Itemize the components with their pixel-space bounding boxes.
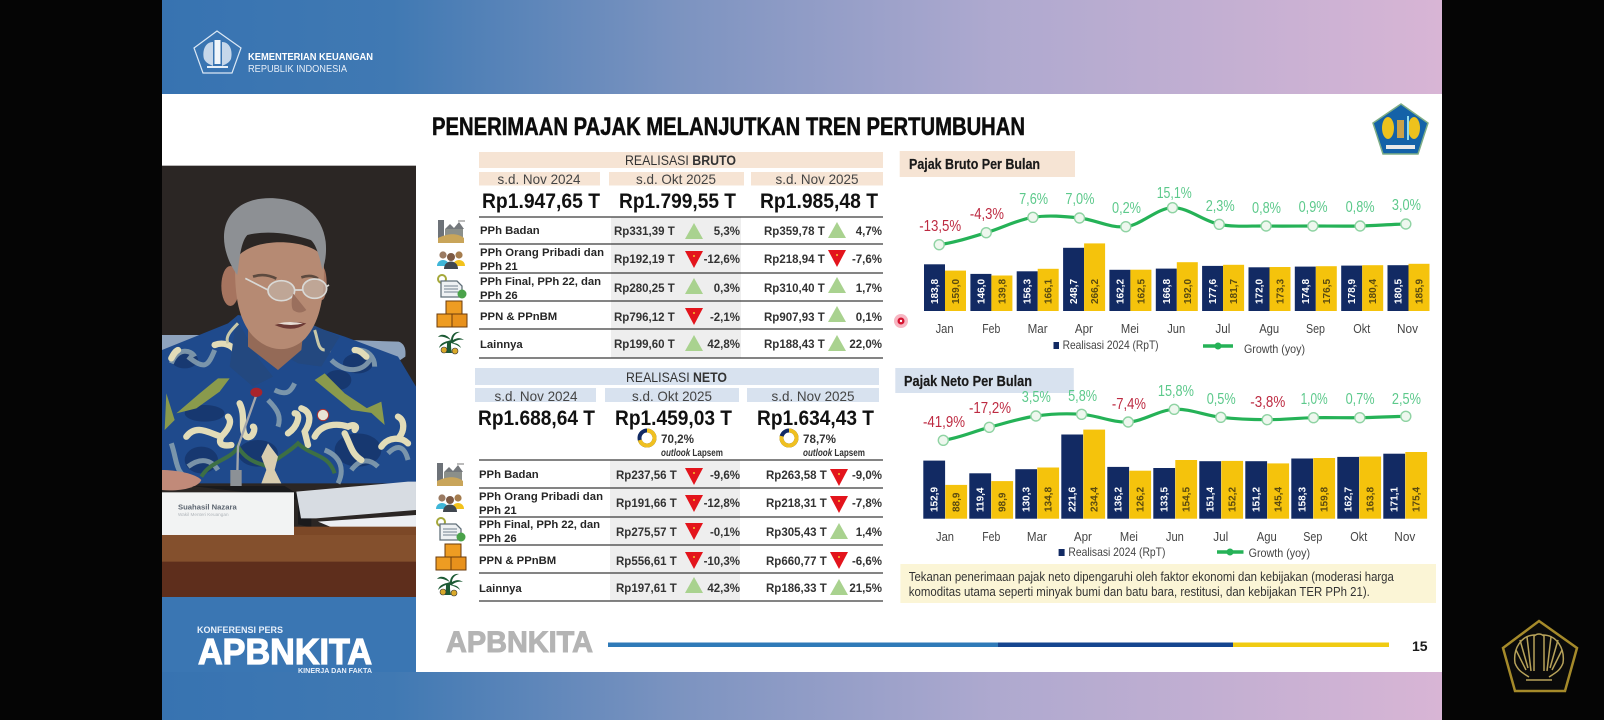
bar values: 146,0 xyxy=(976,279,987,304)
logo: APBNKITA conference: KONFERENSI PERS xyxy=(197,625,283,636)
logo: Kemenkeu emblem xyxy=(1373,104,1428,154)
callout note: komoditas utama seperti minyak bumi dan batu bara, restitusi, dan kebijakan TER PPh 21). xyxy=(909,585,1370,599)
heading: realisasi bruto: REALISASI BRUTO xyxy=(625,152,736,168)
table rows: Rp188,43 T xyxy=(764,339,825,351)
month axis: Jan xyxy=(936,321,954,336)
growth labels: 7,6% xyxy=(1019,191,1048,208)
table rows: 0,3% xyxy=(714,283,740,295)
table rows: Rp310,40 T xyxy=(764,283,825,295)
bar values: 172,0 xyxy=(1254,279,1266,304)
growth labels: 0,2% xyxy=(1112,200,1141,217)
growth labels xyxy=(923,383,1421,431)
logo: APBNKITA conference: APBNKITA xyxy=(198,631,372,672)
panel: realisasi bruto xyxy=(437,152,883,358)
total values: Rp1.985,48 T xyxy=(760,190,878,213)
table rows: 42,3% xyxy=(707,583,740,595)
bar values: 181,7 xyxy=(1229,279,1240,304)
bar values: 159,0 xyxy=(951,279,962,304)
month axis: Mar xyxy=(1027,529,1047,544)
table rows: 1,7% xyxy=(856,283,882,295)
table rows: Rp359,78 T xyxy=(764,226,825,238)
table rows: PPh 26 xyxy=(480,290,518,302)
table rows: -7,6% xyxy=(852,254,882,266)
bar values: 151,4 xyxy=(1206,487,1217,512)
legend: Realisasi 2024 (RpT) xyxy=(1063,338,1159,352)
table rows: Rp280,25 T xyxy=(614,283,675,295)
bars xyxy=(923,430,1427,519)
growth labels: 3,0% xyxy=(1392,197,1421,214)
bar values: 152,2 xyxy=(1228,487,1239,512)
month axis: Jul xyxy=(1213,529,1228,544)
table rows: 21,5% xyxy=(849,583,882,595)
table rows: Rp305,43 T xyxy=(766,527,827,539)
month axis: Feb xyxy=(982,321,1000,336)
table rows xyxy=(479,217,883,358)
growth labels: 2,3% xyxy=(1206,198,1235,215)
bar values: 234,4 xyxy=(1090,487,1101,512)
table rows: PPh 21 xyxy=(479,505,517,517)
growth labels: -17,2% xyxy=(969,400,1011,417)
table rows: PPN & PPnBM xyxy=(479,555,556,567)
bar values: 156,3 xyxy=(1023,279,1034,304)
bar values: 162,7 xyxy=(1344,487,1355,512)
total values: Rp1.459,03 T xyxy=(615,407,732,430)
speaker video photo: Suahasil Nazara xyxy=(178,502,237,511)
bar values: 145,4 xyxy=(1274,487,1285,512)
chart: pajak neto per bulan xyxy=(895,368,1427,560)
table rows: Lainnya xyxy=(479,583,522,595)
column headers xyxy=(479,171,883,187)
footer logo APBNKITA: APBNKITA xyxy=(446,626,593,659)
table rows: -12,8% xyxy=(704,498,740,510)
bar values: 166,1 xyxy=(1044,279,1055,304)
table rows: -12,6% xyxy=(704,254,740,266)
month axis: Okt xyxy=(1353,321,1371,336)
outlook donut okt xyxy=(640,430,723,459)
table rows: Rp263,58 T xyxy=(766,470,827,482)
bar values: 126,2 xyxy=(1136,487,1147,512)
total values xyxy=(482,190,878,213)
total values: Rp1.799,55 T xyxy=(619,190,736,213)
table rows: 4,7% xyxy=(856,226,882,238)
bar values: 119,4 xyxy=(976,487,987,512)
table rows: PPh Orang Pribadi dan xyxy=(480,247,604,259)
white content panel xyxy=(162,94,1442,672)
table rows: PPh Final, PPh 22, dan xyxy=(479,519,600,531)
chart heading: Pajak Bruto Per Bulan xyxy=(909,157,1040,173)
chart heading xyxy=(895,368,1074,393)
heading: realisasi bruto xyxy=(479,152,883,168)
bar values: 136,2 xyxy=(1114,487,1125,512)
month axis xyxy=(936,529,1416,544)
table rows: -6,6% xyxy=(852,556,882,568)
bar values: 98,9 xyxy=(998,492,1009,512)
bar values: 175,4 xyxy=(1412,487,1423,512)
table rows: Rp218,31 T xyxy=(766,498,827,510)
chart heading xyxy=(900,151,1075,177)
table rows: 22,0% xyxy=(849,339,882,351)
bar values: 174,8 xyxy=(1301,279,1312,304)
growth labels: 15,8% xyxy=(1158,383,1194,400)
month axis: Nov xyxy=(1394,529,1416,544)
legend xyxy=(1054,338,1305,356)
month axis: Feb xyxy=(982,529,1000,544)
table rows: Rp660,77 T xyxy=(766,556,827,568)
growth labels: -3,8% xyxy=(1250,394,1285,411)
table rows: PPh Badan xyxy=(480,225,540,237)
bar values: 133,5 xyxy=(1160,487,1171,512)
growth labels: 0,8% xyxy=(1252,200,1281,217)
table rows: Rp556,61 T xyxy=(616,556,677,568)
table rows: Rp191,66 T xyxy=(616,498,677,510)
bars xyxy=(924,243,1430,311)
cursor pointer dot xyxy=(894,314,908,328)
bar values: 180,4 xyxy=(1368,279,1379,304)
growth labels: 3,5% xyxy=(1022,389,1051,406)
slide background band xyxy=(162,0,1442,720)
title: PENERIMAAN PAJAK MELANJUTKAN TREN PERTUMBUHAN xyxy=(432,113,1025,141)
table rows: PPh Final, PPh 22, dan xyxy=(480,276,601,288)
category icons xyxy=(437,220,467,354)
column headers xyxy=(475,388,879,404)
column headers: s.d. Nov 2024 xyxy=(494,388,578,404)
table rows: -2,1% xyxy=(710,312,740,324)
table rows: PPh 21 xyxy=(480,261,518,273)
column headers: s.d. Okt 2025 xyxy=(636,171,716,187)
month axis: Agu xyxy=(1259,321,1279,336)
bar values: 163,8 xyxy=(1366,487,1377,512)
growth labels xyxy=(919,185,1421,235)
month axis: Jan xyxy=(936,529,954,544)
table rows: -10,3% xyxy=(704,556,740,568)
outlook donut nov: 78,7% xyxy=(803,432,836,446)
month axis: Sep xyxy=(1303,529,1322,544)
logo: Kementerian Keuangan: KEMENTERIAN KEUANGAN xyxy=(248,51,373,63)
growth labels: 0,8% xyxy=(1346,199,1375,216)
growth line xyxy=(934,203,1411,250)
bar values: 180,5 xyxy=(1394,279,1404,304)
table rows: Rp199,60 T xyxy=(614,339,675,351)
growth labels: -4,3% xyxy=(970,206,1004,223)
bar values: 134,8 xyxy=(1044,487,1055,512)
month axis: Jul xyxy=(1215,321,1230,336)
table rows: Rp275,57 T xyxy=(616,527,677,539)
table rows: Rp218,94 T xyxy=(764,254,825,266)
bar values xyxy=(930,279,1426,304)
bar values: 88,9 xyxy=(952,492,963,512)
chart heading: Pajak Neto Per Bulan xyxy=(904,374,1032,390)
growth labels: 2,5% xyxy=(1392,391,1421,408)
table rows: 5,3% xyxy=(714,226,740,238)
column headers: s.d. Nov 2025 xyxy=(772,388,855,404)
logo: Kementerian Keuangan: REPUBLIK INDONESIA xyxy=(248,63,347,75)
callout note xyxy=(900,564,1436,603)
speaker video photo xyxy=(162,166,416,597)
speaker video photo: Wakil Menteri Keuangan xyxy=(178,512,229,517)
bar values: 158,3 xyxy=(1298,487,1309,512)
total values: Rp1.688,64 T xyxy=(478,407,595,430)
heading: realisasi neto xyxy=(475,368,879,385)
month axis xyxy=(936,321,1418,336)
bar values: 139,8 xyxy=(997,279,1008,304)
column headers: s.d. Nov 2025 xyxy=(776,171,859,187)
table rows: 1,4% xyxy=(856,527,882,539)
bar values: 159,8 xyxy=(1320,487,1331,512)
heading: realisasi neto: REALISASI NETO xyxy=(626,369,727,385)
legend: Growth (yoy) xyxy=(1244,342,1305,356)
table rows: Rp796,12 T xyxy=(614,312,675,324)
growth labels: 0,5% xyxy=(1207,391,1236,408)
bar values: 154,5 xyxy=(1182,487,1193,512)
month axis: Mei xyxy=(1121,321,1139,336)
table rows: PPh 26 xyxy=(479,533,517,545)
table rows: -7,8% xyxy=(852,498,882,510)
page number: 15 xyxy=(1412,638,1428,654)
table rows: -0,1% xyxy=(710,527,740,539)
bar values: 151,2 xyxy=(1252,487,1263,512)
month axis: Jun xyxy=(1166,529,1184,544)
growth labels: 7,0% xyxy=(1065,191,1094,208)
outlook donut okt: 70,2% xyxy=(661,432,694,446)
total values: Rp1.634,43 T xyxy=(757,407,874,430)
table rows: Rp197,61 T xyxy=(616,583,677,595)
bar values: 173,3 xyxy=(1276,279,1286,304)
bar values: 192,0 xyxy=(1183,279,1194,304)
month axis: Agu xyxy=(1257,529,1277,544)
table rows: Rp237,56 T xyxy=(616,470,677,482)
bar values: 266,2 xyxy=(1090,279,1101,304)
growth labels: -13,5% xyxy=(919,218,961,235)
chart: pajak bruto per bulan xyxy=(900,151,1430,356)
table rows: Rp907,93 T xyxy=(764,312,825,324)
blue strip under the video xyxy=(162,597,416,672)
bar values: 152,9 xyxy=(930,487,941,512)
logo: APBNKITA conference: KINERJA DAN FAKTA xyxy=(298,666,373,675)
table rows: 42,8% xyxy=(707,339,740,351)
growth labels: 5,8% xyxy=(1068,388,1097,405)
legend: Growth (yoy) xyxy=(1249,546,1310,560)
table rows: Rp192,19 T xyxy=(614,254,675,266)
outlook donut okt: outlook Lapsem xyxy=(661,448,723,459)
month axis: Sep xyxy=(1306,321,1325,336)
outlook donut nov xyxy=(782,430,865,459)
footer progress bar xyxy=(608,642,1389,647)
month axis: Mei xyxy=(1120,529,1138,544)
total values xyxy=(478,407,874,430)
month axis: Nov xyxy=(1397,321,1418,336)
table rows: Rp186,33 T xyxy=(766,583,827,595)
bar values: 177,6 xyxy=(1208,279,1219,304)
bar values: 221,6 xyxy=(1068,487,1079,512)
column headers: s.d. Okt 2025 xyxy=(632,388,712,404)
outlook donut nov: outlook Lapsem xyxy=(803,448,865,459)
growth labels: 1,0% xyxy=(1301,391,1328,408)
table rows: PPh Orang Pribadi dan xyxy=(479,491,603,503)
panel: realisasi neto xyxy=(436,368,883,601)
table rows: 0,1% xyxy=(856,312,882,324)
month axis: Okt xyxy=(1350,529,1368,544)
bar values: 183,8 xyxy=(930,279,941,304)
bar values: 162,5 xyxy=(1136,279,1147,304)
table rows: -9,6% xyxy=(710,470,740,482)
bar values: 166,8 xyxy=(1162,279,1173,304)
growth labels: -7,4% xyxy=(1112,396,1146,413)
table rows: PPN & PPnBM xyxy=(480,311,557,323)
growth labels: 0,9% xyxy=(1299,199,1328,216)
table rows: Lainnya xyxy=(480,339,523,351)
total values: Rp1.947,65 T xyxy=(482,190,600,213)
bar values: 162,2 xyxy=(1115,279,1126,304)
table rows xyxy=(479,460,883,601)
month axis: Mar xyxy=(1028,321,1048,336)
growth labels: 0,7% xyxy=(1346,391,1375,408)
month axis: Apr xyxy=(1075,321,1093,336)
bar values xyxy=(930,487,1423,512)
legend xyxy=(1059,545,1310,560)
growth labels: -41,9% xyxy=(923,414,965,431)
bar values: 171,1 xyxy=(1390,487,1401,512)
logo: Kementerian Keuangan xyxy=(194,31,373,75)
month axis: Apr xyxy=(1074,529,1092,544)
table rows: PPh Badan xyxy=(479,469,539,481)
bar values: 185,9 xyxy=(1414,279,1426,304)
table rows: Rp331,39 T xyxy=(614,226,675,238)
growth labels: 15,1% xyxy=(1157,185,1192,202)
logo: gold watermark emblem xyxy=(1503,621,1577,691)
legend: Realisasi 2024 (RpT) xyxy=(1068,545,1165,559)
table rows: -9,0% xyxy=(852,470,882,482)
category icons xyxy=(436,463,466,596)
bar values: 248,7 xyxy=(1069,279,1080,304)
callout note: Tekanan penerimaan pajak neto dipengaruhi oleh faktor ekonomi dan kebijakan (moderasi harga xyxy=(909,570,1394,584)
month axis: Jun xyxy=(1167,321,1185,336)
growth line xyxy=(938,404,1411,445)
bar values: 130,3 xyxy=(1022,487,1033,512)
bar values: 176,5 xyxy=(1322,279,1333,304)
bar values: 178,9 xyxy=(1347,279,1358,304)
column headers: s.d. Nov 2024 xyxy=(498,171,581,187)
